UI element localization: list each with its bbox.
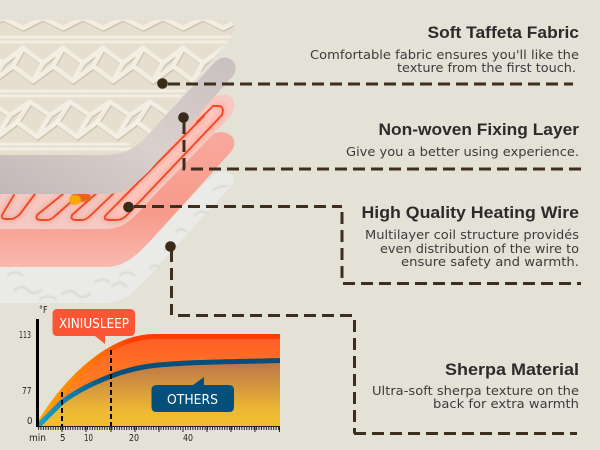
chart: warm-up comparison	[19, 305, 280, 444]
heading and text: Soft Taffeta Fabric	[310, 24, 579, 75]
heading and text: Soft Taffeta Fabric: Comfortable fabric ensures you'll like the	[310, 47, 579, 62]
non-woven layer	[0, 58, 236, 194]
red heat layer	[0, 132, 234, 267]
axis labels: 5	[60, 433, 66, 444]
y axis	[36, 319, 39, 427]
callout: XINIUSLEEP	[52, 309, 135, 344]
axis labels: 77	[22, 386, 32, 397]
sherpa layer	[0, 172, 234, 303]
axis labels: min	[29, 433, 46, 444]
heading and text: High Quality Heating Wire: Multilayer coil structure providés	[365, 227, 579, 242]
area: xiniusleep band	[38, 335, 280, 426]
callout lines	[134, 84, 582, 434]
line: xiniusleep	[38, 336, 280, 426]
area: others band	[38, 360, 280, 426]
heading and text: Soft Taffeta Fabric: Soft Taffeta Fabric	[428, 24, 579, 42]
callout: XINIUSLEEP: XINIUSLEEP	[59, 317, 129, 332]
heading and text: Non-woven Fixing Layer: Non-woven Fixing Layer	[378, 121, 580, 139]
heating wire panel	[0, 95, 234, 229]
heading and text: Sherpa Material	[372, 361, 579, 411]
heading and text: Non-woven Fixing Layer	[346, 121, 580, 159]
axis labels: 113	[19, 330, 31, 341]
axis labels: 40	[183, 433, 193, 444]
heading and text: Sherpa Material: Sherpa Material	[445, 361, 579, 379]
axis labels	[19, 305, 193, 444]
heading and text: Sherpa Material: back for extra warmth	[433, 396, 579, 411]
axis labels: °F	[39, 305, 48, 316]
heading and text: Soft Taffeta Fabric: texture from the first touch.	[397, 60, 576, 75]
dashed time markers	[62, 350, 111, 426]
callout dots	[123, 78, 189, 252]
x axis ticks	[38, 426, 280, 432]
line: others	[38, 360, 280, 426]
heading and text: High Quality Heating Wire	[362, 204, 579, 269]
heading and text: High Quality Heating Wire: ensure safety and warmth.	[401, 254, 579, 269]
axis labels: 20	[129, 433, 139, 444]
wire coil	[2, 106, 223, 220]
heading and text: High Quality Heating Wire: High Quality Heating Wire	[362, 204, 579, 222]
panel: layer stack illustration	[0, 20, 240, 303]
heading and text: Sherpa Material: Ultra-soft sherpa texture on the	[372, 383, 579, 398]
axis labels: 0	[27, 416, 32, 427]
hot spot	[69, 192, 91, 205]
taffeta fabric layer	[0, 20, 240, 156]
heading and text: High Quality Heating Wire: even distribution of the wire to	[380, 241, 579, 256]
wire glow	[2, 106, 223, 220]
heading and text: Non-woven Fixing Layer: Give you a better using experience.	[346, 144, 579, 159]
callout: OTHERS	[152, 377, 234, 412]
axis labels: 10	[84, 433, 93, 444]
callout: OTHERS: OTHERS	[167, 393, 218, 408]
